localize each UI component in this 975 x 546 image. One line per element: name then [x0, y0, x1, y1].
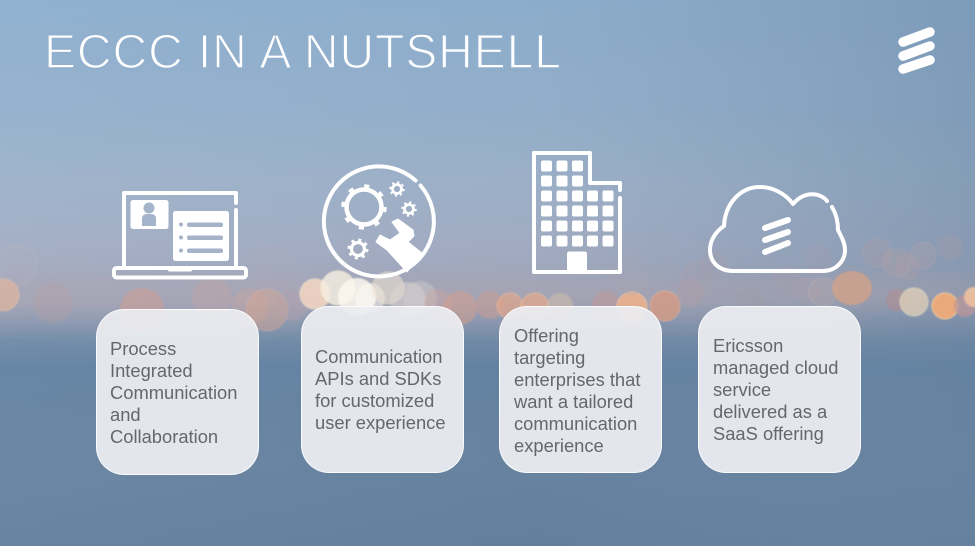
icon: cloud with Ericsson mark — [710, 187, 845, 271]
text: card 4 — [713, 335, 838, 444]
panel: enterprise offering card — [499, 306, 662, 473]
text: card 3: want a tailored — [514, 391, 633, 412]
text: card 4: SaaS offering — [713, 423, 824, 444]
text: card 2: user experience — [315, 412, 446, 433]
panel: managed cloud service card — [698, 306, 861, 473]
text: card 1: and — [110, 404, 141, 425]
icon: gears and wrench in a circle — [324, 166, 434, 276]
text: card 4: delivered as a — [713, 401, 827, 422]
title: ECCC IN A NUTSHELL — [44, 26, 561, 79]
text: card 2 — [315, 346, 446, 433]
icon: Ericsson logo — [903, 32, 930, 69]
text: card 4: managed cloud — [713, 357, 838, 378]
text: card 3: Offering — [514, 325, 579, 346]
text: card 2: Communication — [315, 346, 442, 367]
text: card 1: Communication — [110, 382, 237, 403]
text: card 1: Integrated — [110, 360, 193, 381]
text: card 3 — [514, 325, 640, 456]
text: card 4: Ericsson — [713, 335, 783, 356]
text: card 1: Process — [110, 338, 176, 359]
text: card 3: targeting — [514, 347, 585, 368]
panel: APIs and SDKs card — [301, 306, 464, 473]
icon: office building — [534, 153, 620, 272]
text: card 2: for customized — [315, 390, 434, 411]
text: card 3: communication — [514, 413, 637, 434]
text: card 1: Collaboration — [110, 426, 218, 447]
icon: laptop with profile and list — [114, 193, 246, 278]
text: card 3: enterprises that — [514, 369, 640, 390]
text: card 2: APIs and SDKs — [315, 368, 441, 389]
text: card 3: experience — [514, 435, 604, 456]
text: card 4: service — [713, 379, 771, 400]
panel: process integrated communication card — [96, 309, 259, 475]
text: card 1 — [110, 338, 237, 447]
